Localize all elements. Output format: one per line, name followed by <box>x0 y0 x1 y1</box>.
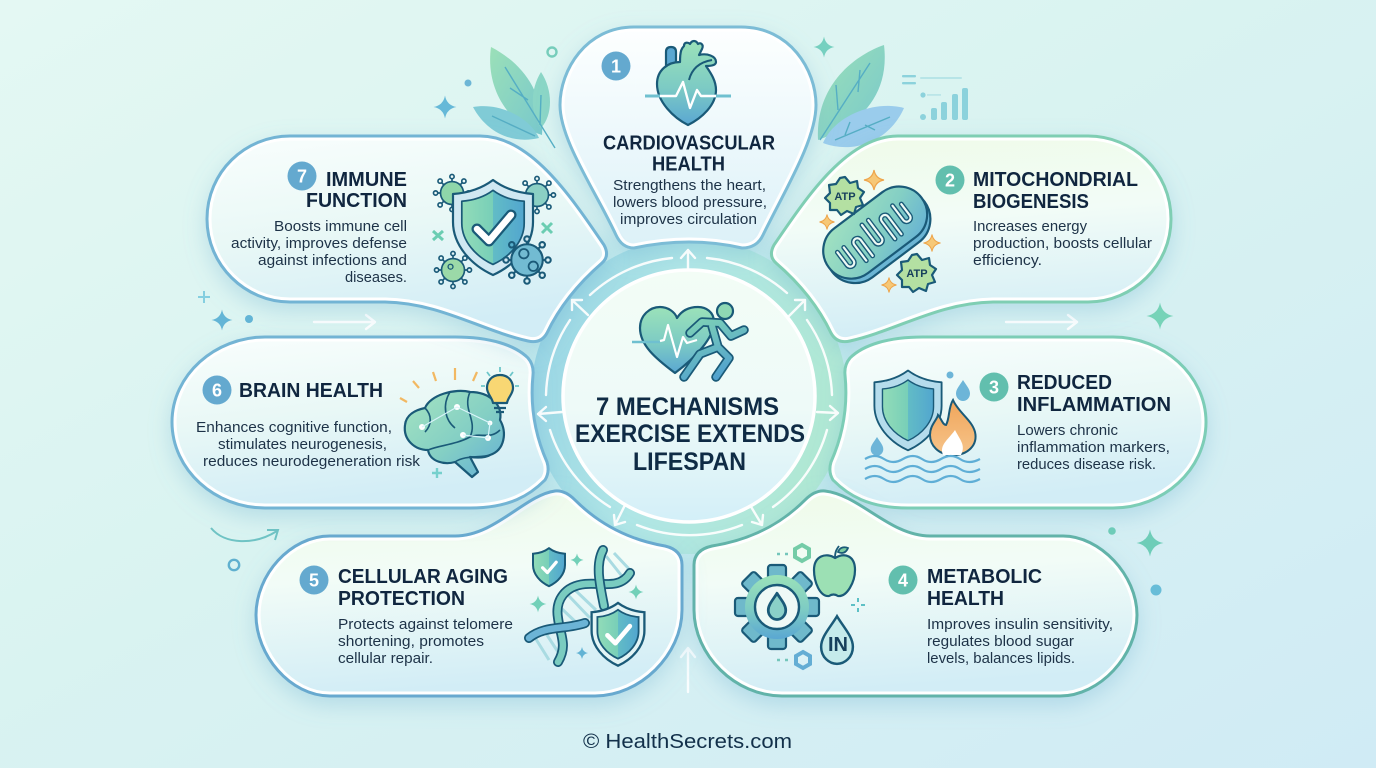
heading 3: INFLAMMATION <box>1017 394 1171 416</box>
body 6: Enhances cognitive function, <box>196 420 392 436</box>
panel 4 shape <box>694 491 1137 696</box>
badge 1 <box>602 52 630 80</box>
body 1: Strengthens the heart, <box>613 178 766 194</box>
body 7: Boosts immune cell <box>274 219 407 235</box>
body 2: Increases energy <box>973 219 1088 235</box>
icon: mitochondrion: ATP <box>906 268 928 280</box>
body 1: lowers blood pressure, <box>613 195 767 211</box>
panel 2: mitochondrial biogenesis <box>771 136 1171 342</box>
badge 2 <box>936 166 964 194</box>
panel 4: metabolic health <box>694 491 1137 696</box>
panel 3: reduced inflammation <box>830 337 1206 508</box>
body 1: improves circulation <box>620 212 757 228</box>
heading 7: FUNCTION <box>306 190 407 212</box>
central ring <box>509 216 869 576</box>
body 6: reduces neurodegeneration risk <box>203 454 421 470</box>
icon: gear, apple and insulin drop <box>735 545 865 668</box>
icon: brain and light bulb <box>400 367 519 478</box>
heading 4: HEALTH <box>927 588 1004 610</box>
body 5: cellular repair. <box>338 651 433 667</box>
body 4: regulates blood sugar <box>927 634 1074 650</box>
title: 7 MECHANISMS <box>596 393 779 421</box>
icon: shield, flame and water <box>865 371 980 482</box>
badge 5: 5 <box>309 570 319 590</box>
body 7: diseases. <box>345 270 407 286</box>
panel 1: cardiovascular health <box>560 27 816 248</box>
badge 5 <box>300 566 328 594</box>
badge 6 <box>202 376 232 404</box>
panel 5 shape <box>256 491 682 696</box>
heading 5: CELLULAR AGING <box>338 566 508 588</box>
badge 3: 3 <box>989 378 999 398</box>
badge 4: 4 <box>898 570 908 590</box>
decoration: top right leaves and chart <box>814 36 968 147</box>
icon: mitochondrion <box>812 170 942 295</box>
icon: shield and viruses <box>433 174 556 289</box>
body 4: levels, balances lipids. <box>927 651 1075 667</box>
icon: DNA and shields <box>529 548 644 666</box>
heading 7: IMMUNE <box>326 169 407 191</box>
panel 3 shape <box>830 337 1206 508</box>
decoration: top left leaves <box>434 47 556 148</box>
icon: mitochondrion: ATP <box>834 191 856 203</box>
panel 1 shape <box>560 27 816 248</box>
body 5: shortening, promotes <box>338 634 484 650</box>
ring dashes and arrows <box>538 250 838 535</box>
badge 1: 1 <box>611 56 621 76</box>
heading 1: CARDIOVASCULAR <box>603 132 776 154</box>
heading 6: BRAIN HEALTH <box>239 380 383 402</box>
badge 7: 7 <box>297 166 307 186</box>
body 2: production, boosts cellular <box>973 236 1152 252</box>
panel 2 shape <box>771 136 1171 342</box>
title: EXERCISE EXTENDS <box>575 420 805 448</box>
body 4: Improves insulin sensitivity, <box>927 617 1113 633</box>
center disc <box>563 270 815 522</box>
badge 2: 2 <box>945 170 955 190</box>
panel 6 shape <box>172 337 548 508</box>
panel 5: cellular aging protection <box>256 491 682 696</box>
badge 6: 6 <box>212 380 222 400</box>
icon: gear, apple and insulin drop: IN <box>828 634 848 656</box>
body 3: inflammation markers, <box>1017 440 1170 456</box>
decoration: side sparkles and arrows <box>198 291 1174 692</box>
icon: heart <box>645 41 731 125</box>
body 3: reduces disease risk. <box>1017 457 1156 473</box>
panel 7 shape <box>207 136 607 342</box>
icon: heart and runner <box>632 303 744 377</box>
footer copyright: © HealthSecrets.com <box>583 731 792 753</box>
heading 5: PROTECTION <box>338 588 465 610</box>
body 6: stimulates neurogenesis, <box>218 437 387 453</box>
heading 1: HEALTH <box>652 154 725 176</box>
badge 4 <box>888 566 918 594</box>
title: LIFESPAN <box>633 448 746 476</box>
body 5: Protects against telomere <box>338 617 513 633</box>
heading 2: MITOCHONDRIAL <box>973 169 1138 191</box>
heading 4: METABOLIC <box>927 566 1042 588</box>
body 2: efficiency. <box>973 253 1042 269</box>
badge 7 <box>288 162 316 190</box>
panel 6: brain health <box>172 337 548 508</box>
heading 3: REDUCED <box>1017 372 1112 394</box>
heading 2: BIOGENESIS <box>973 191 1089 213</box>
body 7: against infections and <box>258 253 407 269</box>
body 3: Lowers chronic <box>1017 423 1118 439</box>
panel 7: immune function <box>207 136 607 342</box>
badge 3 <box>980 372 1008 402</box>
body 7: activity, improves defense <box>231 236 407 252</box>
